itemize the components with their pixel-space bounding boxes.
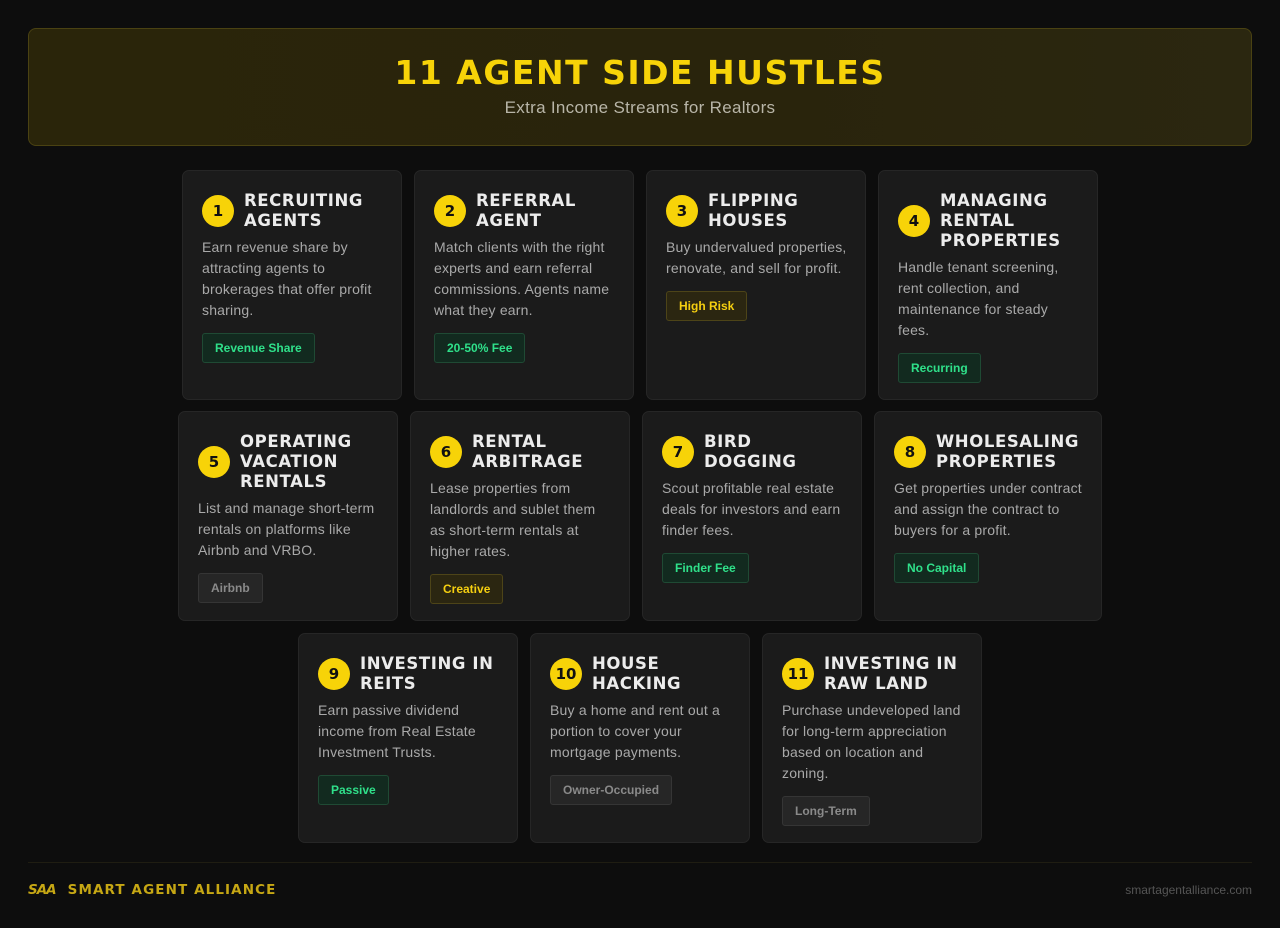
card 1: RECRUITING [244,191,363,210]
card 1: sharing. [202,302,253,318]
card 10: Buy a home and rent out a [550,702,720,718]
card 4: rent collection, and [898,280,1020,296]
card 8: WHOLESALING [936,432,1079,451]
card 8 [874,411,1102,621]
card 10: HACKING [592,674,681,693]
card 11: for long-term appreciation [782,723,947,739]
card 10: mortgage payments. [550,744,681,760]
card 10: HOUSE [592,654,659,673]
card 1: Revenue Share [215,341,302,355]
card 3 [646,170,866,400]
card 2: experts and earn referral [434,260,592,276]
card 9 [298,633,518,843]
card 3: HOUSES [708,211,788,230]
card 3: renovate, and sell for profit. [666,260,842,276]
footer brand: SAA SMART AGENT ALLIANCE [28,882,276,898]
card 5: OPERATING [240,432,352,451]
card 1 [182,170,402,400]
card 1: AGENTS [244,211,322,230]
card 4: fees. [898,322,929,338]
card 7: 7 [673,443,683,461]
card 3: FLIPPING [708,191,798,210]
card 2: Match clients with the right [434,239,605,255]
card 7 [642,411,862,621]
card 6 [410,411,630,621]
card 10: Owner-Occupied [563,783,659,797]
card 11: zoning. [782,765,829,781]
card 11: Purchase undeveloped land [782,702,961,718]
card 10: portion to cover your [550,723,682,739]
card 6: 6 [441,443,451,461]
card 4 [878,170,1098,400]
card 2: 2 [445,202,455,220]
card 4: RENTAL [940,211,1015,230]
card 9: Earn passive dividend [318,702,459,718]
card 11: based on location and [782,744,923,760]
card 8: buyers for a profit. [894,522,1011,538]
card 2 [414,170,634,400]
card 3: 3 [677,202,687,220]
card 1: brokerages that offer profit [202,281,372,297]
card 4: 4 [909,212,919,230]
card 11: Long-Term [795,804,857,818]
card 7: DOGGING [704,452,797,471]
card 9: 9 [329,665,339,683]
card 5: Airbnb [211,581,250,595]
card 4: maintenance for steady [898,301,1048,317]
card 6: higher rates. [430,543,510,559]
card 2: AGENT [476,211,542,230]
footer url: smartagentalliance.com [1125,883,1252,897]
card 5: 5 [209,453,219,471]
card 2: REFERRAL [476,191,576,210]
card 5: RENTALS [240,472,327,491]
card 2: what they earn. [434,302,533,318]
card 6: RENTAL [472,432,547,451]
card 4: PROPERTIES [940,231,1061,250]
card 11: INVESTING IN [824,654,958,673]
title: 11 AGENT SIDE HUSTLES [394,53,886,92]
card 4: MANAGING [940,191,1048,210]
card 7: finder fees. [662,522,734,538]
card 9: Investment Trusts. [318,744,436,760]
card 11 [762,633,982,843]
subtitle: Extra Income Streams for Realtors [505,98,775,117]
card 6: as short-term rentals at [430,522,579,538]
card 7: deals for investors and earn [662,501,840,517]
card 2: commissions. Agents name [434,281,609,297]
card 4: Recurring [911,361,968,375]
card 8: PROPERTIES [936,452,1057,471]
card 3: High Risk [679,299,734,313]
card 6: Creative [443,582,490,596]
card 5 [178,411,398,621]
card 7: Finder Fee [675,561,736,575]
card 5: VACATION [240,452,338,471]
card 3: Buy undervalued properties, [666,239,847,255]
card 2: 20-50% Fee [447,341,512,355]
card 9: REITS [360,674,416,693]
card 8: 8 [905,443,915,461]
card 10 [530,633,750,843]
card 8: and assign the contract to [894,501,1060,517]
card 5: List and manage short-term [198,500,374,516]
header banner [28,28,1252,146]
card 11: RAW LAND [824,674,928,693]
card 8: Get properties under contract [894,480,1082,496]
card 10: 10 [556,665,576,683]
card 7: BIRD [704,432,752,451]
card 11: 11 [788,665,808,683]
card 5: Airbnb and VRBO. [198,542,316,558]
card 9: INVESTING IN [360,654,494,673]
card 6: ARBITRAGE [472,452,583,471]
card 6: Lease properties from [430,480,570,496]
card 1: Earn revenue share by [202,239,348,255]
card 1: 1 [213,202,223,220]
card 8: No Capital [907,561,966,575]
card 6: landlords and sublet them [430,501,595,517]
card 4: Handle tenant screening, [898,259,1058,275]
card 5: rentals on platforms like [198,521,351,537]
card 7: Scout profitable real estate [662,480,834,496]
card 9: Passive [331,783,376,797]
card 9: income from Real Estate [318,723,476,739]
card 1: attracting agents to [202,260,325,276]
